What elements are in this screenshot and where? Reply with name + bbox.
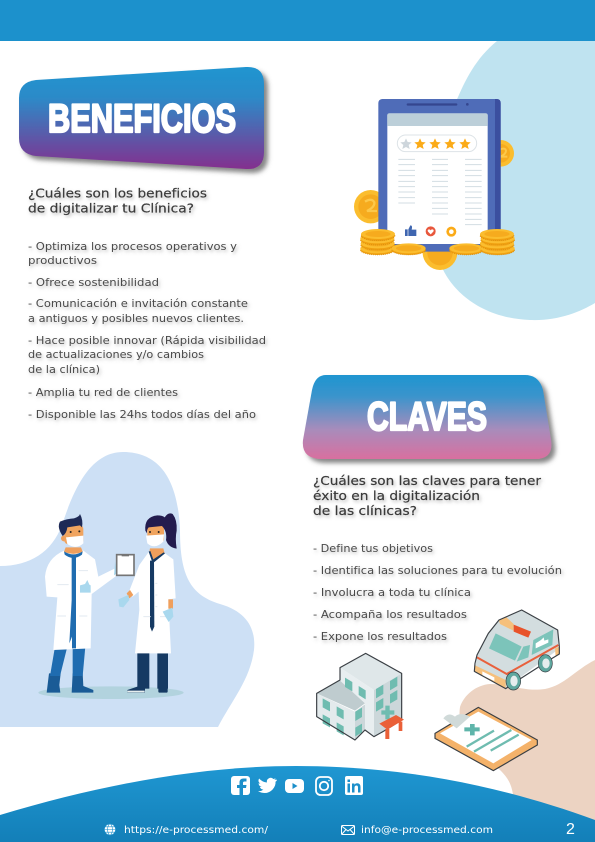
- floor shadow: [38, 686, 184, 699]
- ambulance outline: [474, 610, 559, 689]
- heading: beneficios question: [28, 186, 207, 216]
- list: beneficios: [28, 241, 266, 421]
- heading: claves question: ¿Cuáles son las claves para tener: [313, 473, 542, 488]
- heading: claves question: éxito en la digitalización: [313, 488, 480, 503]
- tower and wing faces: [317, 653, 402, 740]
- banner title: BENEFICIOS: [48, 97, 236, 141]
- red stripe: [477, 645, 558, 674]
- coins behind tablet: [354, 140, 514, 270]
- banner shape: [303, 375, 551, 459]
- windows: [489, 629, 553, 662]
- heading: claves question: [313, 473, 542, 518]
- email text: info@e-processmed.com: [361, 825, 493, 836]
- orange bumpers and rear: [474, 617, 559, 689]
- heading: beneficios question: de digitalizar tu Clínica?: [28, 200, 194, 216]
- ambulance body: [475, 610, 558, 687]
- heading: beneficios question: ¿Cuáles son los beneficios: [28, 186, 207, 200]
- windows: [323, 677, 397, 736]
- list: claves: - Involucra a toda tu clínica: [313, 587, 471, 599]
- page number: 2: [566, 821, 575, 838]
- doctor: woman: [118, 513, 177, 693]
- list: beneficios: - Optimiza los procesos operativos y: [28, 241, 237, 253]
- list: beneficios: - Ofrece sostenibilidad: [28, 277, 159, 289]
- icon: globe: [104, 824, 116, 835]
- list: beneficios: productivos: [28, 255, 97, 267]
- icon: linkedin: [345, 776, 363, 795]
- list: beneficios: - Disponible las 24hs todos días del año: [28, 409, 256, 421]
- list: beneficios: de actualizaciones y/o cambios: [28, 349, 204, 361]
- heading: claves question: de las clínicas?: [313, 503, 417, 518]
- list: claves: [313, 543, 562, 643]
- icon: youtube: [285, 779, 304, 793]
- blob: pale blue behind doctors: [0, 452, 254, 727]
- list: beneficios: - Hace posible innovar (Rápida visibilidad: [28, 335, 266, 347]
- plate: [482, 671, 494, 681]
- building outline: [317, 653, 402, 740]
- icon: twitter: [258, 778, 277, 793]
- cross mark: [536, 637, 548, 648]
- list: beneficios: de la clínica): [28, 364, 100, 376]
- illustration: ambulance: [474, 610, 559, 690]
- wheels: [506, 655, 552, 690]
- tablet body: [378, 99, 501, 252]
- blob: light blue top right: [440, 41, 595, 320]
- social icons: [231, 776, 363, 795]
- wheel hubs: [510, 658, 550, 686]
- website text: https://e-processmed.com/: [124, 825, 269, 836]
- list: claves: - Expone los resultados: [313, 631, 447, 643]
- list: beneficios: - Comunicación e invitación constante: [28, 298, 248, 310]
- blob: beige bottom right: [459, 660, 595, 842]
- illustration: hospital building: [317, 653, 404, 740]
- illustration: patient clipboard: [435, 707, 537, 771]
- doctor: man: [45, 514, 117, 693]
- list: beneficios: a antiguos y posibles nuevos clientes.: [28, 313, 244, 325]
- footer band: [0, 766, 595, 842]
- website link: [104, 824, 269, 836]
- red light: [514, 625, 531, 638]
- red awning: [379, 715, 404, 739]
- list: claves: - Acompaña los resultados: [313, 609, 467, 621]
- icon: instagram: [316, 777, 332, 795]
- top bar: [0, 0, 595, 41]
- illustration: two doctors: [38, 513, 184, 699]
- rating pill: [397, 135, 477, 152]
- list: beneficios: - Amplia tu red de clientes: [28, 387, 178, 399]
- illustration: tablet with rating and coins: [354, 99, 515, 270]
- coin stacks: [360, 229, 515, 255]
- review lines: [398, 159, 482, 225]
- icon: envelope: [342, 826, 354, 834]
- list: claves: - Identifica las soluciones para tu evolución: [313, 565, 562, 577]
- banner shape: [19, 67, 264, 169]
- tablet screen: [387, 113, 488, 244]
- banner: claves: [303, 375, 551, 459]
- list: claves: - Define tus objetivos: [313, 543, 433, 555]
- reaction icons: [405, 225, 456, 237]
- banner title: CLAVES: [367, 395, 487, 439]
- clipboard held: [114, 554, 134, 575]
- icon: facebook: [231, 776, 250, 795]
- email contact: [342, 825, 493, 836]
- banner: beneficios: [19, 67, 264, 169]
